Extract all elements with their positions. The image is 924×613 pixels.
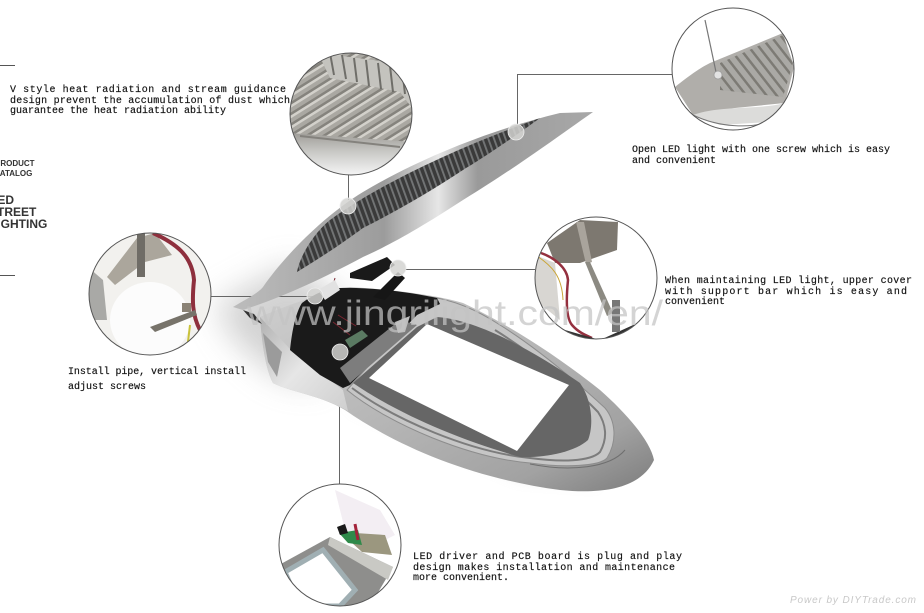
hinge arm bbox=[350, 257, 395, 281]
shell crease at tip bbox=[530, 450, 625, 468]
heat sink fins bbox=[297, 118, 540, 272]
caption: heat radiation: design prevent the accumulation of dust which bbox=[10, 95, 290, 107]
internal cylinder bbox=[318, 280, 340, 300]
green circuit board bbox=[345, 330, 368, 348]
caption: support bar: with support bar which is easy and bbox=[665, 286, 907, 298]
caption: support bar: When maintaining LED light, upper cover bbox=[665, 275, 912, 287]
lower housing shell bbox=[260, 287, 654, 491]
ground shadow bbox=[215, 265, 600, 484]
side slot bbox=[263, 333, 282, 377]
detail circle: screw bbox=[672, 8, 794, 130]
watermark: www.jingrilight.com/en/ bbox=[246, 294, 663, 333]
upper cover body bbox=[233, 112, 593, 310]
driver tray bbox=[340, 320, 417, 383]
street light illustration bbox=[233, 112, 654, 491]
left header rule bottom bbox=[0, 275, 15, 276]
dark driver compartment bbox=[290, 288, 440, 388]
caption: open with one screw: and convenient bbox=[632, 155, 716, 167]
tray bracket bbox=[395, 316, 410, 333]
detail circle: driver and PCB bbox=[279, 484, 401, 606]
caption: open with one screw: Open LED light with one screw which is easy bbox=[632, 144, 890, 156]
detail circle: install pipe bbox=[89, 233, 211, 358]
connector lines bbox=[211, 74, 672, 484]
white lens window bbox=[369, 324, 569, 451]
caption: heat radiation: V style heat radiation and stream guidance bbox=[10, 84, 286, 96]
gray lens frame bbox=[353, 317, 591, 457]
cover tip shadow bbox=[243, 310, 262, 324]
detail circle: heat sink fins bbox=[290, 53, 412, 175]
caption: install pipe: Install pipe, vertical install bbox=[68, 366, 246, 378]
internal wires bbox=[330, 278, 356, 335]
caption: install pipe: adjust screws bbox=[68, 381, 146, 393]
lens rim bbox=[347, 297, 614, 466]
rim inner band bbox=[352, 330, 605, 460]
caption: driver and PCB: LED driver and PCB board is plug and play bbox=[413, 551, 682, 563]
shell bright left side bbox=[260, 317, 348, 411]
footer credit: Power by DIYTrade.com bbox=[790, 595, 916, 606]
caption: support bar: convenient bbox=[665, 296, 725, 308]
caption: heat radiation: guarantee the heat radiation ability bbox=[10, 105, 226, 117]
caption: driver and PCB: design makes installation and maintenance bbox=[413, 562, 675, 574]
caption: driver and PCB: more convenient. bbox=[413, 572, 509, 584]
callout nodes bbox=[307, 124, 524, 360]
detail circle: support bar bbox=[535, 217, 657, 340]
support bar bbox=[373, 272, 405, 300]
left header rule top bbox=[0, 65, 15, 66]
